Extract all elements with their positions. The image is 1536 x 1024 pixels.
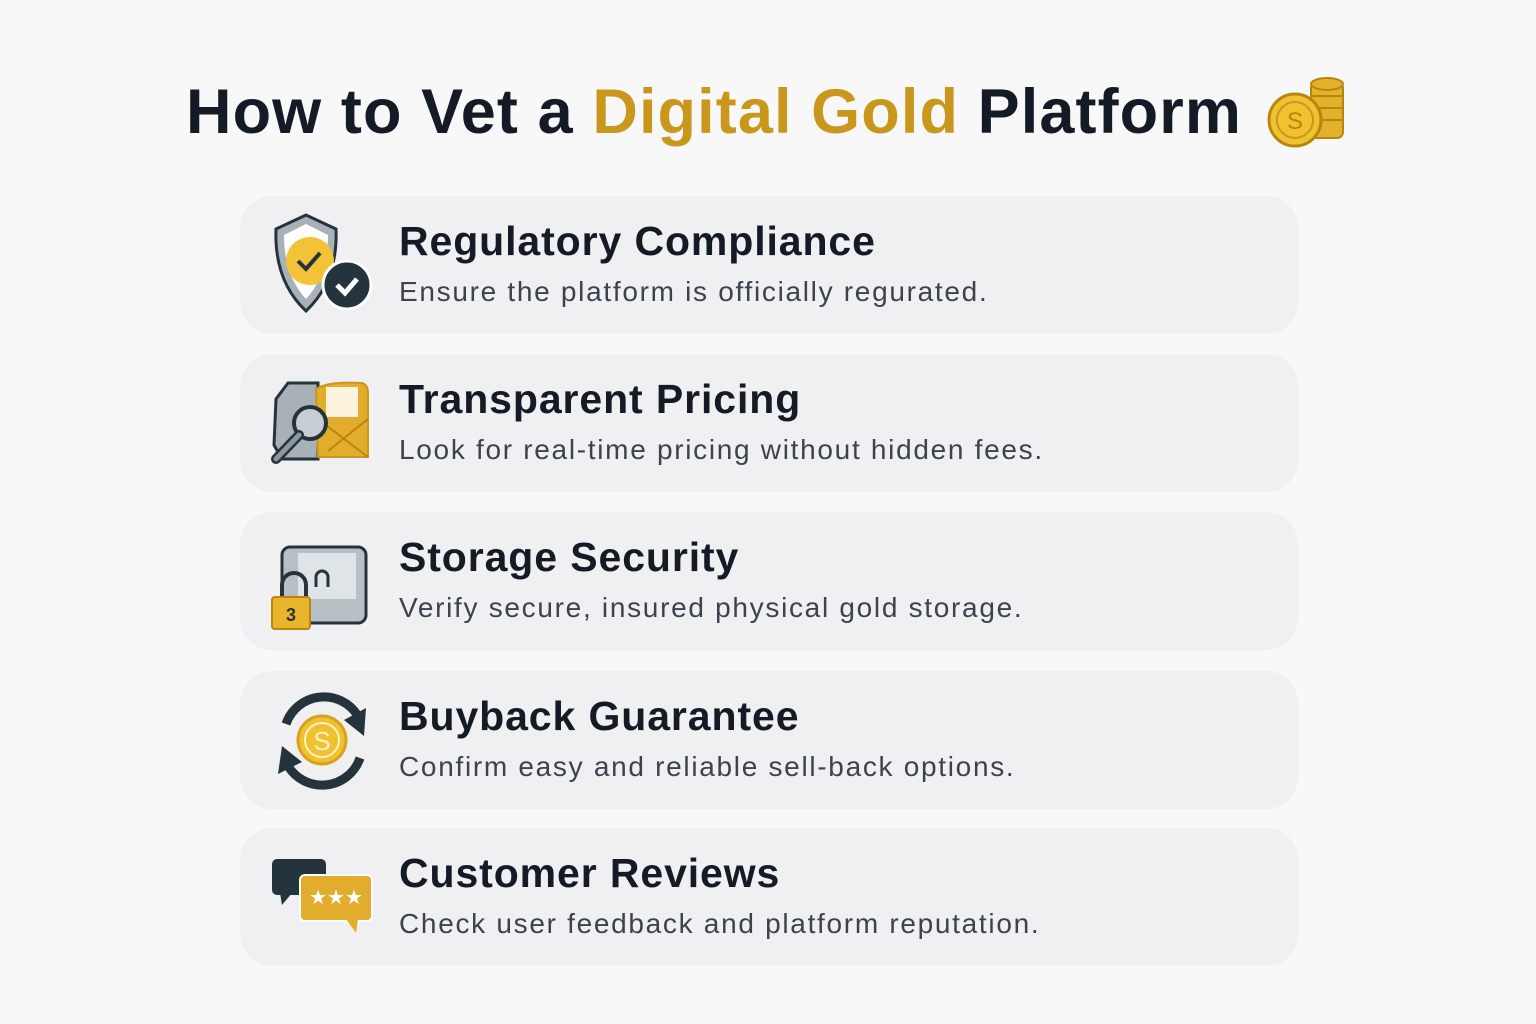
icon: cycle coin (278, 692, 366, 790)
text: Ensure the platform is officially regurated. (399, 276, 988, 307)
icon: vault lock (271, 546, 368, 630)
panel: transparent pricing (240, 354, 1298, 492)
heading: Regulatory Compliance (399, 218, 876, 264)
icon: cycle coin: S (313, 726, 331, 756)
heading: Buyback Guarantee (399, 693, 799, 739)
heading: Customer Reviews (399, 850, 780, 896)
heading: Transparent Pricing (399, 376, 801, 422)
panel: customer reviews (240, 828, 1298, 966)
text: Look for real-time pricing without hidden fees. (399, 434, 1044, 465)
icon: shield (274, 213, 372, 313)
icon: speech bubbles: ★★★ (309, 885, 363, 909)
title: How to Vet a Digital Gold Platform (186, 77, 1242, 147)
text: Verify secure, insured physical gold storage. (399, 592, 1023, 623)
icon: speech bubbles (272, 859, 373, 933)
text: Confirm easy and reliable sell-back options. (399, 751, 1015, 782)
panel: regulatory compliance (240, 196, 1298, 334)
icon: coin stack (1268, 77, 1344, 148)
icon: vault lock: 3 (286, 605, 296, 625)
panel: buyback guarantee (240, 671, 1298, 809)
icon: coin stack: S (1287, 108, 1303, 135)
icon: magnifier envelope (271, 382, 369, 464)
panel: storage security (240, 512, 1298, 650)
heading: Storage Security (399, 534, 739, 580)
text: Check user feedback and platform reputation. (399, 908, 1040, 939)
